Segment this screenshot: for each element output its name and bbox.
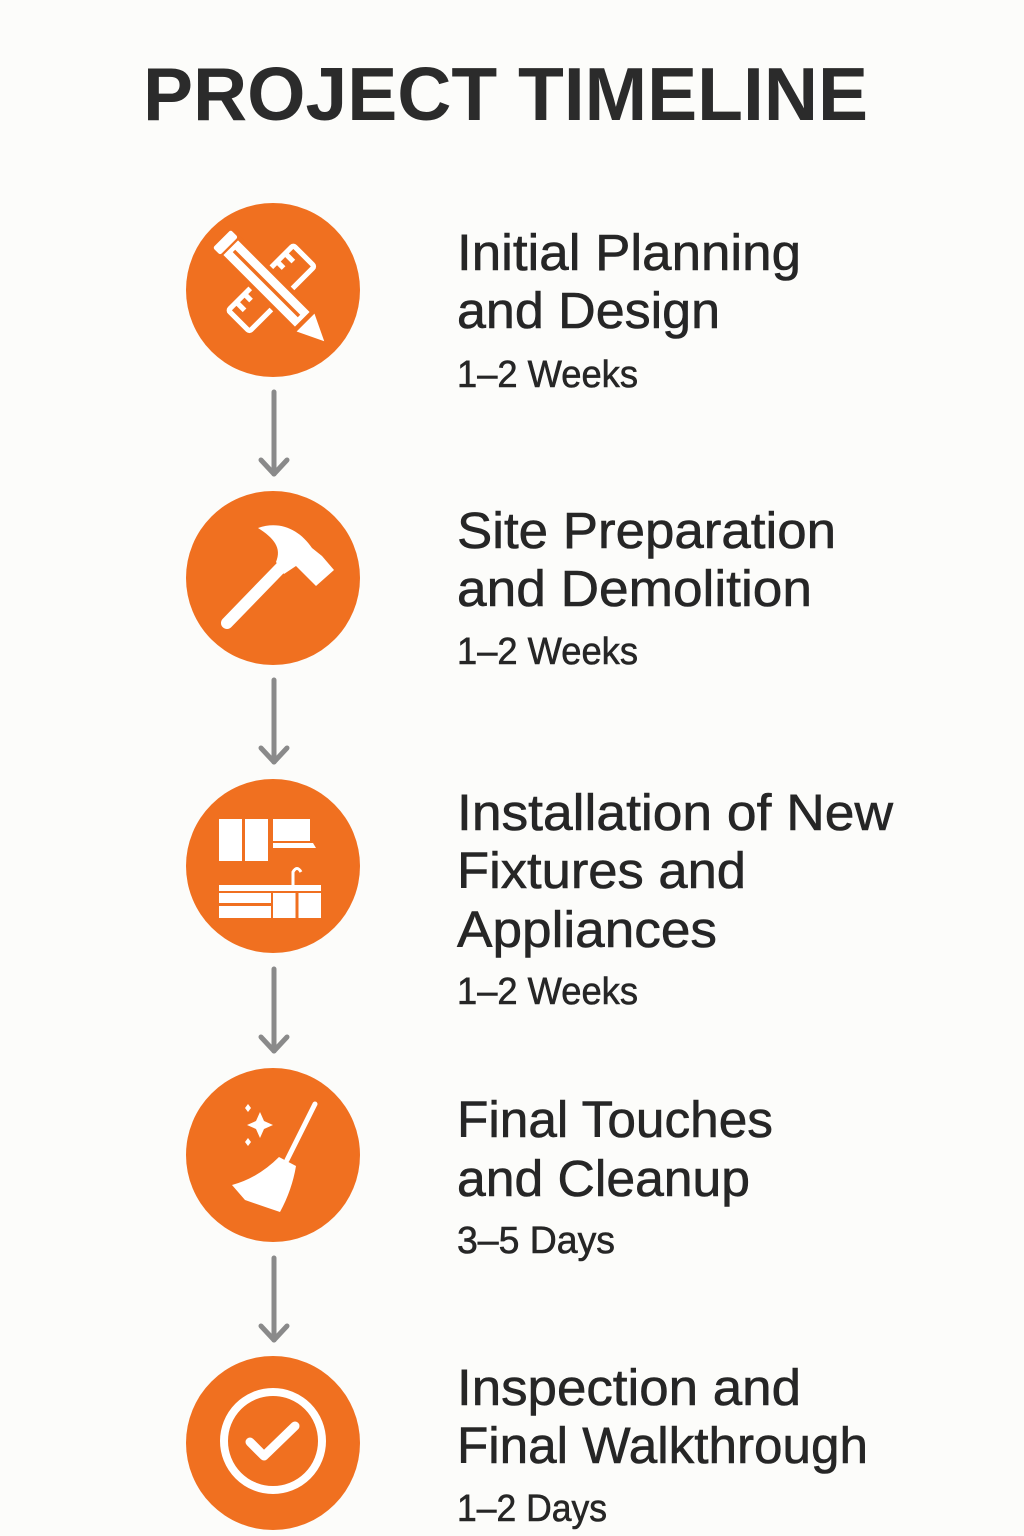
text: step 4: and Cleanup — [457, 1150, 750, 1207]
icon: hammer — [186, 491, 360, 665]
step 4: cleanup — [186, 1068, 773, 1262]
text: step 1: Initial Planning — [457, 224, 801, 281]
step 5: inspection — [186, 1356, 868, 1530]
text: step 3: Installation of New — [457, 784, 893, 841]
text: step 2: and Demolition — [457, 560, 812, 617]
text: step 1: and Design — [457, 282, 720, 339]
text: step 2: Site Preparation — [457, 502, 836, 559]
icon: check mark — [186, 1356, 360, 1530]
text: step 4 — [457, 1091, 773, 1262]
text: step 5: 1–2 Days — [457, 1488, 607, 1530]
text: step 3 — [457, 784, 893, 1013]
text: step 5: Inspection and — [457, 1359, 801, 1416]
step 1: planning — [186, 203, 801, 396]
step 2: demolition — [186, 491, 836, 673]
text: step 5 — [457, 1359, 868, 1530]
text: step 3: Fixtures and — [457, 842, 746, 899]
text: step 1: 1–2 Weeks — [457, 354, 638, 396]
arrow 3 — [261, 969, 287, 1051]
text: step 2: 1–2 Weeks — [457, 631, 638, 673]
text: step 2 — [457, 502, 836, 673]
text: step 3: 1–2 Weeks — [457, 971, 638, 1013]
text: step 5: Final Walkthrough — [457, 1417, 868, 1474]
icon: broom and sparkles — [186, 1068, 360, 1242]
icon: kitchen cabinets — [186, 779, 360, 953]
text: step 4: 3–5 Days — [457, 1220, 615, 1262]
icon: pencil and ruler — [186, 203, 360, 377]
text: step 4: Final Touches — [457, 1091, 773, 1148]
text: step 3: Appliances — [457, 901, 717, 958]
arrow 2 — [261, 680, 287, 762]
step 3: installation — [186, 779, 893, 1013]
arrow 1 — [261, 392, 287, 474]
text: step 1 — [457, 224, 801, 396]
title: PROJECT TIMELINE — [143, 52, 868, 136]
arrow 4 — [261, 1258, 287, 1340]
